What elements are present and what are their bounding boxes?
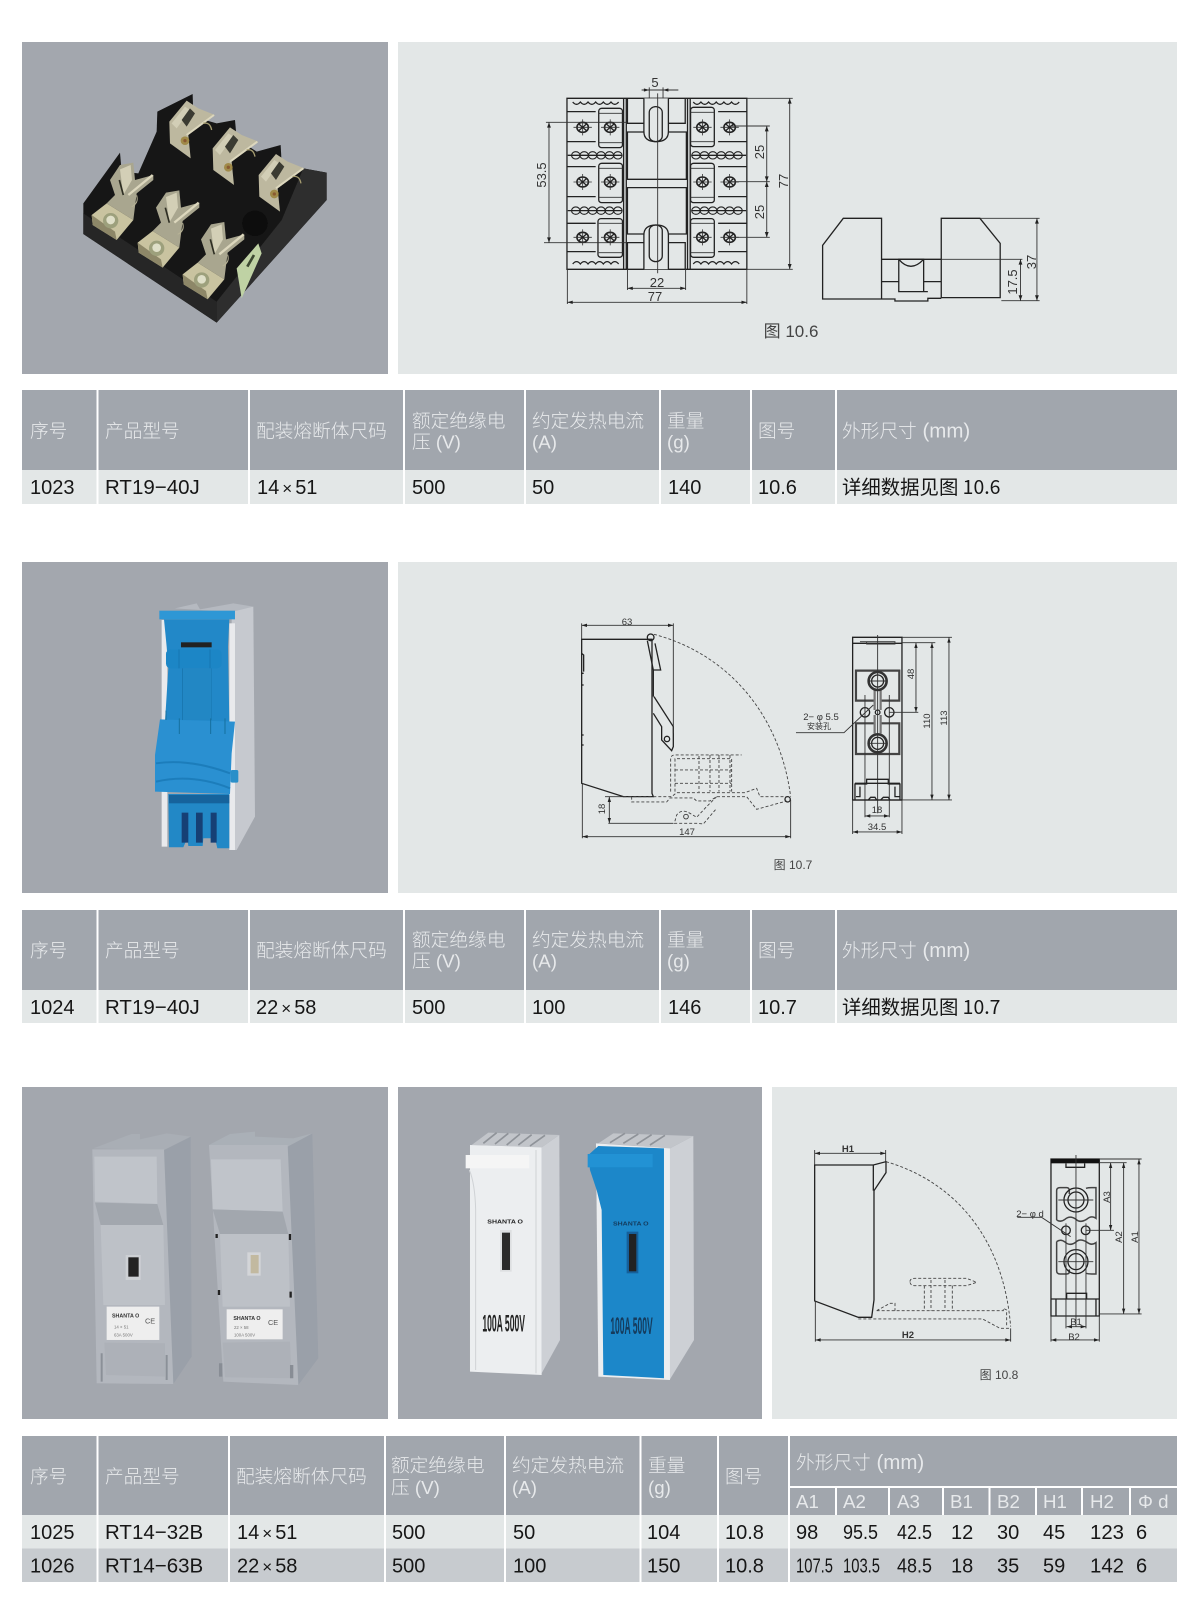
table data row 1026: 103.5 xyxy=(843,1556,880,1578)
table header row: (A) xyxy=(532,950,557,972)
dimension labels 10.7: 安装孔 xyxy=(807,721,831,731)
dimension labels 10.7: 110 xyxy=(922,713,933,729)
table header row: 图号 xyxy=(758,420,795,442)
table data row 1025: 98 xyxy=(796,1522,818,1544)
photo: RT14-63B grey fuse holder: CE xyxy=(268,1318,278,1327)
table header row: 配装熔断体尺码 xyxy=(236,1466,367,1487)
table data row 1026: 35 xyxy=(997,1556,1019,1578)
table data row 1026: 59 xyxy=(1043,1556,1065,1578)
photo: white 100A 500V fuse holder: SHANTA O xyxy=(487,1219,524,1225)
table data row 1025: 50 xyxy=(513,1522,535,1544)
table data row: 22×58 xyxy=(256,997,316,1019)
dimension labels 10.6: 17.5 xyxy=(1005,269,1020,295)
dimension labels 10.6: 37 xyxy=(1024,255,1039,269)
panel: dimension drawing 10.6 xyxy=(398,42,1177,374)
table data row 1026: 1026 xyxy=(30,1556,74,1578)
table header row: Φ d xyxy=(1138,1491,1168,1512)
dimension labels 10.8: H2 xyxy=(902,1330,914,1341)
table header row: H2 xyxy=(1090,1491,1114,1512)
dimension labels 10.8: H1 xyxy=(842,1144,855,1155)
table data row 1025: 10.8 xyxy=(725,1522,764,1544)
table header row xyxy=(30,930,970,972)
table data row: 100 xyxy=(532,997,565,1019)
table header row: 压 (V) xyxy=(391,1477,440,1498)
table data row 1025: 14×51 xyxy=(237,1522,297,1544)
table header row: 产品型号 xyxy=(105,940,180,961)
table data row: 详细数据见图 10.7 xyxy=(842,991,1000,1020)
dimension labels 10.8: A2 xyxy=(1114,1231,1125,1243)
table header row: 重量 xyxy=(667,410,704,432)
table data row: 详细数据见图 10.6 xyxy=(842,471,1000,500)
table header row: 产品型号 xyxy=(105,1466,180,1487)
photo: blue RT19-40J fuse holder xyxy=(155,603,255,850)
table data row 1025: 6 xyxy=(1136,1522,1147,1544)
table header row: (g) xyxy=(648,1477,671,1498)
table: models 1025 and 1026 xyxy=(22,1436,1177,1582)
photo: RT19-40J three-pole black fuse base xyxy=(83,94,327,323)
dimension labels 10.6: 77 xyxy=(776,174,791,188)
table data row: 1023 xyxy=(30,477,74,499)
dimension labels 10.8: B2 xyxy=(1068,1332,1080,1343)
photo: RT14-63B grey fuse holder: SHANTA O xyxy=(233,1316,261,1322)
panel: product photo 10.7 xyxy=(22,562,388,893)
panel: dimension drawing 10.8 xyxy=(772,1087,1177,1419)
table header row: 配装熔断体尺码 xyxy=(256,940,387,961)
table data row xyxy=(30,471,1000,500)
table data row 1025: 500 xyxy=(392,1522,425,1544)
table data row 1026: 100 xyxy=(513,1556,546,1578)
table data row 1025: 42.5 xyxy=(897,1522,932,1544)
table data row 1025: 104 xyxy=(647,1522,680,1544)
dimension labels 10.8: A3 xyxy=(1102,1191,1113,1203)
table header row: B1 xyxy=(950,1491,973,1512)
dimension labels 10.6: 53.5 xyxy=(534,162,549,188)
table data row xyxy=(30,991,1000,1020)
dimension labels 10.7: 2− φ 5.5 xyxy=(803,712,839,723)
table header row: 图号 xyxy=(758,940,795,961)
table data row: RT19−40J xyxy=(105,996,200,1019)
table data row 1026: 10.8 xyxy=(725,1556,764,1578)
table: model 1024 xyxy=(22,910,1177,1023)
table data row 1025: 30 xyxy=(997,1522,1019,1544)
dimension labels 10.6: 25 xyxy=(752,205,767,219)
table data row 1026: 500 xyxy=(392,1556,425,1578)
table data row: 1024 xyxy=(30,997,74,1019)
table data row: 500 xyxy=(412,997,445,1019)
table data row 1026: 48.5 xyxy=(897,1556,932,1578)
table data row: 10.6 xyxy=(758,477,797,499)
table header row: 额定绝缘电 xyxy=(391,1455,484,1476)
dimension labels 10.6: 5 xyxy=(651,75,659,90)
table header row xyxy=(30,1451,1168,1512)
photo: RT14-63B grey fuse holder: 100A 500V xyxy=(234,1333,255,1338)
dimension labels 10.7: 63 xyxy=(622,617,632,628)
dimension labels 10.8: 2− φ d xyxy=(1016,1209,1044,1220)
photo: blue 100A 500V fuse holder: 100A 500V xyxy=(610,1313,653,1340)
dimension labels 10.6: 77 xyxy=(648,289,662,304)
table header row: 外形尺寸 (mm) xyxy=(842,420,970,442)
dimension labels 10.6 xyxy=(534,75,1039,304)
dimension labels 10.7: 113 xyxy=(939,710,950,726)
table header row: 重量 xyxy=(648,1455,685,1476)
dimension labels 10.7: 18 xyxy=(872,805,882,816)
dimension labels 10.7: 18 xyxy=(597,804,608,814)
table data row: RT19−40J xyxy=(105,476,200,499)
photo: RT14-32B grey fuse holder: CE xyxy=(145,1316,155,1325)
table header row: 外形尺寸 (mm) xyxy=(796,1451,924,1474)
dimension labels 10.7: 147 xyxy=(679,827,695,838)
photo: RT14-32B grey fuse holder xyxy=(92,1133,192,1384)
drawing: top and side views with dimension lines xyxy=(544,87,1040,304)
table header row: B2 xyxy=(997,1491,1020,1512)
table data row 1025: 12 xyxy=(951,1522,973,1544)
caption: figure 10.8: 图 10.8 xyxy=(980,1368,1019,1382)
photo: white 100A 500V fuse holder: 100A 500V xyxy=(482,1311,525,1338)
panel: product photo grey holders xyxy=(22,1087,388,1419)
dimension labels 10.8: A1 xyxy=(1130,1231,1141,1243)
table data row 1026: 22×58 xyxy=(237,1556,297,1578)
table header row: 约定发热电流 xyxy=(512,1455,624,1476)
table data row: 50 xyxy=(532,477,554,499)
photo: RT14-32B grey fuse holder: 14 × 51 xyxy=(114,1324,129,1329)
table data row 1025: 95.5 xyxy=(843,1522,878,1544)
table header row: 压 (V) xyxy=(412,432,461,452)
photo: RT14-32B grey fuse holder: 63A 500V xyxy=(114,1333,133,1338)
table header row: (A) xyxy=(532,432,557,452)
table header row: 额定绝缘电 xyxy=(412,410,505,432)
table: model 1023 xyxy=(22,390,1177,504)
dimension labels 10.8: B1 xyxy=(1070,1317,1082,1328)
table header row: 额定绝缘电 xyxy=(412,930,505,950)
dimension labels 10.6: 25 xyxy=(752,145,767,159)
caption: figure 10.6: 图 10.6 xyxy=(764,322,818,341)
dimension labels 10.7: 48 xyxy=(906,669,917,679)
photo: RT14-63B grey fuse holder xyxy=(209,1132,318,1385)
caption: figure 10.7: 图 10.7 xyxy=(774,858,813,872)
photo: blue 100A 500V fuse holder xyxy=(588,1133,694,1380)
table header row: 产品型号 xyxy=(105,420,180,442)
table header row: A1 xyxy=(796,1491,819,1512)
table data row 1025: 45 xyxy=(1043,1522,1065,1544)
table data row 1026: 6 xyxy=(1136,1556,1147,1578)
table header row: 压 (V) xyxy=(412,950,461,972)
table header row: 序号 xyxy=(30,420,67,442)
table data row: 14×51 xyxy=(257,477,317,499)
table data row 1025: 123 xyxy=(1090,1522,1124,1544)
drawing: side and front views xyxy=(582,623,952,838)
table data row 1025: 1025 xyxy=(30,1522,74,1544)
panel: product photo white and blue holders xyxy=(398,1087,762,1419)
table data row 1026: 150 xyxy=(647,1556,680,1578)
table data row 1025 xyxy=(30,1521,1147,1544)
table data row: 140 xyxy=(668,477,701,499)
table data row 1026: RT14−63B xyxy=(105,1554,203,1578)
photo: blue 100A 500V fuse holder: SHANTA O xyxy=(613,1221,649,1227)
table header row: 约定发热电流 xyxy=(532,930,644,950)
table data row: 146 xyxy=(668,997,701,1019)
panel: dimension drawing 10.7 xyxy=(398,562,1177,893)
drawing: side and front views xyxy=(815,1150,1142,1342)
table header row: 约定发热电流 xyxy=(532,410,644,432)
dimension labels 10.7: 34.5 xyxy=(868,822,886,833)
table header row: 序号 xyxy=(30,940,67,961)
table header row: (g) xyxy=(667,432,690,452)
table header row: A3 xyxy=(897,1491,920,1512)
table header row: 序号 xyxy=(30,1466,67,1487)
dimension labels 10.7 xyxy=(597,617,950,838)
photo: white 100A 500V fuse holder xyxy=(466,1133,560,1375)
table data row 1025: RT14−32B xyxy=(105,1521,203,1544)
table data row 1026: 107.5 xyxy=(796,1556,833,1578)
table header row: (A) xyxy=(512,1477,537,1498)
table header row: 图号 xyxy=(725,1466,762,1487)
table header row xyxy=(30,410,970,452)
table header row: 配装熔断体尺码 xyxy=(256,420,387,442)
dimension labels 10.6: 22 xyxy=(650,275,664,290)
table header row: (g) xyxy=(667,950,690,972)
dimension labels 10.8 xyxy=(842,1144,1141,1343)
panel: product photo 10.6 xyxy=(22,42,388,374)
photo: RT14-63B grey fuse holder: 22 × 58 xyxy=(234,1325,249,1330)
table header row: 外形尺寸 (mm) xyxy=(842,939,970,962)
table header row: 重量 xyxy=(667,930,704,950)
table data row 1026 xyxy=(30,1554,1147,1578)
table header row: A2 xyxy=(843,1491,866,1512)
table data row: 500 xyxy=(412,477,445,499)
photo: RT14-32B grey fuse holder: SHANTA O xyxy=(112,1314,139,1320)
table header row: H1 xyxy=(1043,1491,1067,1512)
table data row: 10.7 xyxy=(758,997,797,1019)
table data row 1026: 142 xyxy=(1090,1556,1124,1578)
table data row 1026: 18 xyxy=(951,1556,973,1578)
